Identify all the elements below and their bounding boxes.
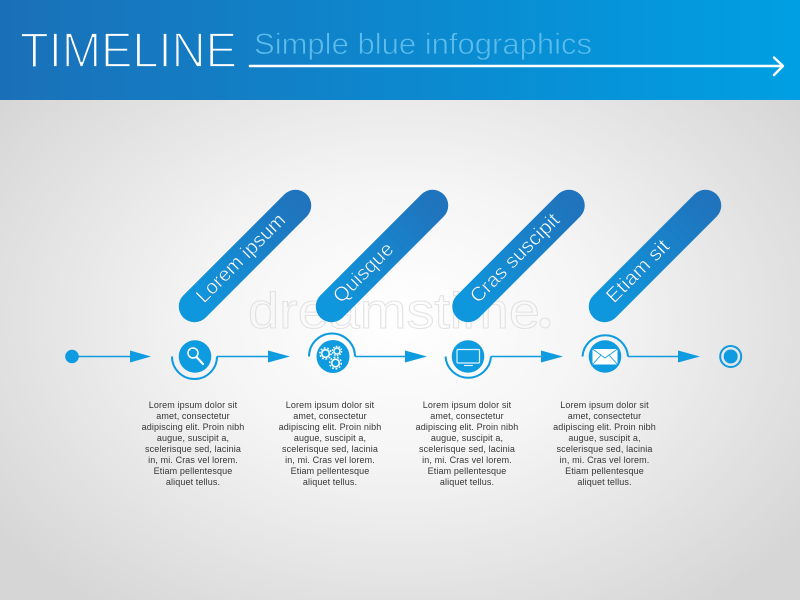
text block: step 1: Lorem ipsum dolor sit [149,400,238,410]
text block: step 2 [279,400,381,487]
text block: step 3: adipiscing elit. Proin nibh [416,422,518,432]
arrow: step 3 to step 4 [491,350,563,362]
text block: step 2: Etiam pellentesque [291,466,369,476]
text block: step 1: scelerisque sed, lacinia [145,444,241,454]
text block: step 2: adipiscing elit. Proin nibh [279,422,381,432]
text block: step 4: in, mi. Cras vel lorem. [560,455,649,465]
text block: step 4: augue, suscipit a, [568,433,641,443]
icon: envelope [592,349,618,364]
text block: step 2: scelerisque sed, lacinia [282,444,378,454]
arrow: step 1 to step 2 [217,350,290,362]
text block: step 4: amet, consectetur [568,411,641,421]
watermark: dreamstime [248,283,540,339]
arrow: step 4 to end [628,350,700,362]
text block: step 1: augue, suscipit a, [157,433,229,443]
step 2 node: gears [309,334,355,373]
text block: step 3: Etiam pellentesque [428,466,506,476]
text block: step 4: Etiam pellentesque [565,466,644,476]
text block: step 1: adipiscing elit. Proin nibh [142,422,244,432]
header banner [0,0,800,100]
text block: step 4: scelerisque sed, lacinia [557,444,652,454]
text block: step 1 [142,400,244,487]
step 3 node: monitor [446,340,491,378]
text block: step 4: aliquet tellus. [577,477,632,487]
text block: step 3: augue, suscipit a, [431,433,503,443]
text block: step 1: in, mi. Cras vel lorem. [148,455,238,465]
text block: step 2: Lorem ipsum dolor sit [286,400,375,410]
text block: step 3: scelerisque sed, lacinia [419,444,515,454]
pill: Cras suscipit: Cras suscipit [466,209,565,308]
text block: step 3: Lorem ipsum dolor sit [423,400,512,410]
text block: step 4 [553,400,656,487]
step 4 node: envelope [582,335,628,373]
text block: step 1: amet, consectetur [156,411,230,421]
text block: step 2: in, mi. Cras vel lorem. [285,455,375,465]
subtitle: Simple blue infographics [254,28,592,61]
pill: Lorem ipsum: Lorem ipsum [192,209,290,308]
icon: gears [320,346,342,369]
text block: step 3: in, mi. Cras vel lorem. [422,455,512,465]
title: TIMELINE [20,24,237,78]
timeline start dot [65,350,79,363]
text block: step 1: Etiam pellentesque [154,466,232,476]
text block: step 3 [416,400,518,487]
text block: step 1: aliquet tellus. [166,477,220,487]
arrow: step 2 to step 3 [355,350,427,362]
text block: step 3: aliquet tellus. [440,477,494,487]
step 1 node: search [172,340,217,379]
icon: monitor [457,350,480,366]
text block: step 4: Lorem ipsum dolor sit [560,400,649,410]
icon: magnifier [188,348,203,364]
pill: Quisque: Quisque [329,238,398,308]
arrow: start to step 1 [78,350,151,362]
pill: Etiam sit [602,206,706,308]
text block: step 2: amet, consectetur [293,411,367,421]
pill: Quisque [329,206,432,308]
text block: step 3: amet, consectetur [430,411,504,421]
timeline end marker [720,346,741,367]
text block: step 2: aliquet tellus. [303,477,357,487]
text block: step 4: adipiscing elit. Proin nibh [553,422,656,432]
arrow: header [250,58,783,75]
pill: Etiam sit: Etiam sit [602,235,674,308]
text block: step 2: augue, suscipit a, [294,433,366,443]
